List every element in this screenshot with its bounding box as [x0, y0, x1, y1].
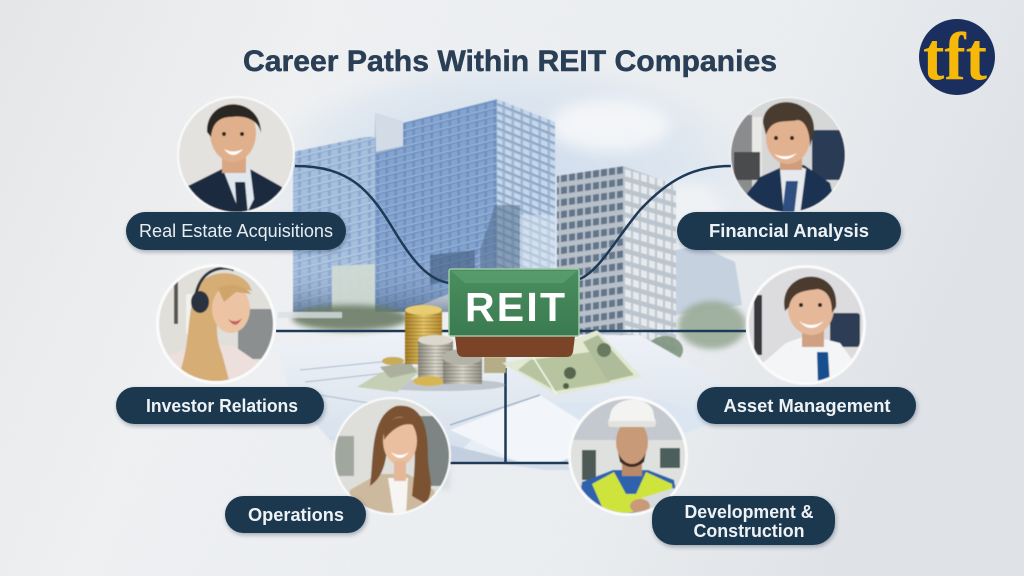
portrait: investor relations — [156, 264, 276, 384]
portrait: real estate acquisitions — [176, 95, 296, 215]
illustration: blueprints on table — [277, 333, 745, 490]
label: development and construction: Construction — [694, 521, 804, 541]
illustration: stacks of coins — [357, 305, 506, 392]
label: operations — [225, 496, 366, 533]
label: operations: Operations — [248, 505, 344, 525]
label: asset management — [697, 387, 916, 424]
label: investor relations: Investor Relations — [146, 396, 298, 416]
illustration: office buildings — [278, 99, 746, 365]
illustration: dollar bills — [502, 330, 642, 395]
label: real estate acquisitions: Real Estate Acquisitions — [139, 221, 333, 241]
label: asset management: Asset Management — [724, 396, 890, 416]
portrait: development and construction — [568, 396, 688, 516]
label: investor relations — [116, 387, 324, 424]
portrait: operations — [332, 396, 452, 516]
label: financial analysis: Financial Analysis — [709, 221, 869, 241]
label: financial analysis — [677, 212, 901, 250]
connector lines — [276, 166, 746, 464]
label: development and construction — [652, 496, 835, 545]
label: real estate acquisitions — [126, 212, 346, 250]
logo: tft badge: tft — [923, 18, 987, 94]
REIT label: REIT — [465, 284, 565, 330]
portrait: financial analysis — [728, 95, 848, 215]
portrait: asset management — [746, 265, 866, 385]
REIT sign — [449, 269, 579, 357]
label: development and construction: Development & — [684, 502, 814, 522]
sky behind buildings — [260, 65, 760, 315]
title: Career Paths Within REIT Companies — [243, 45, 777, 78]
